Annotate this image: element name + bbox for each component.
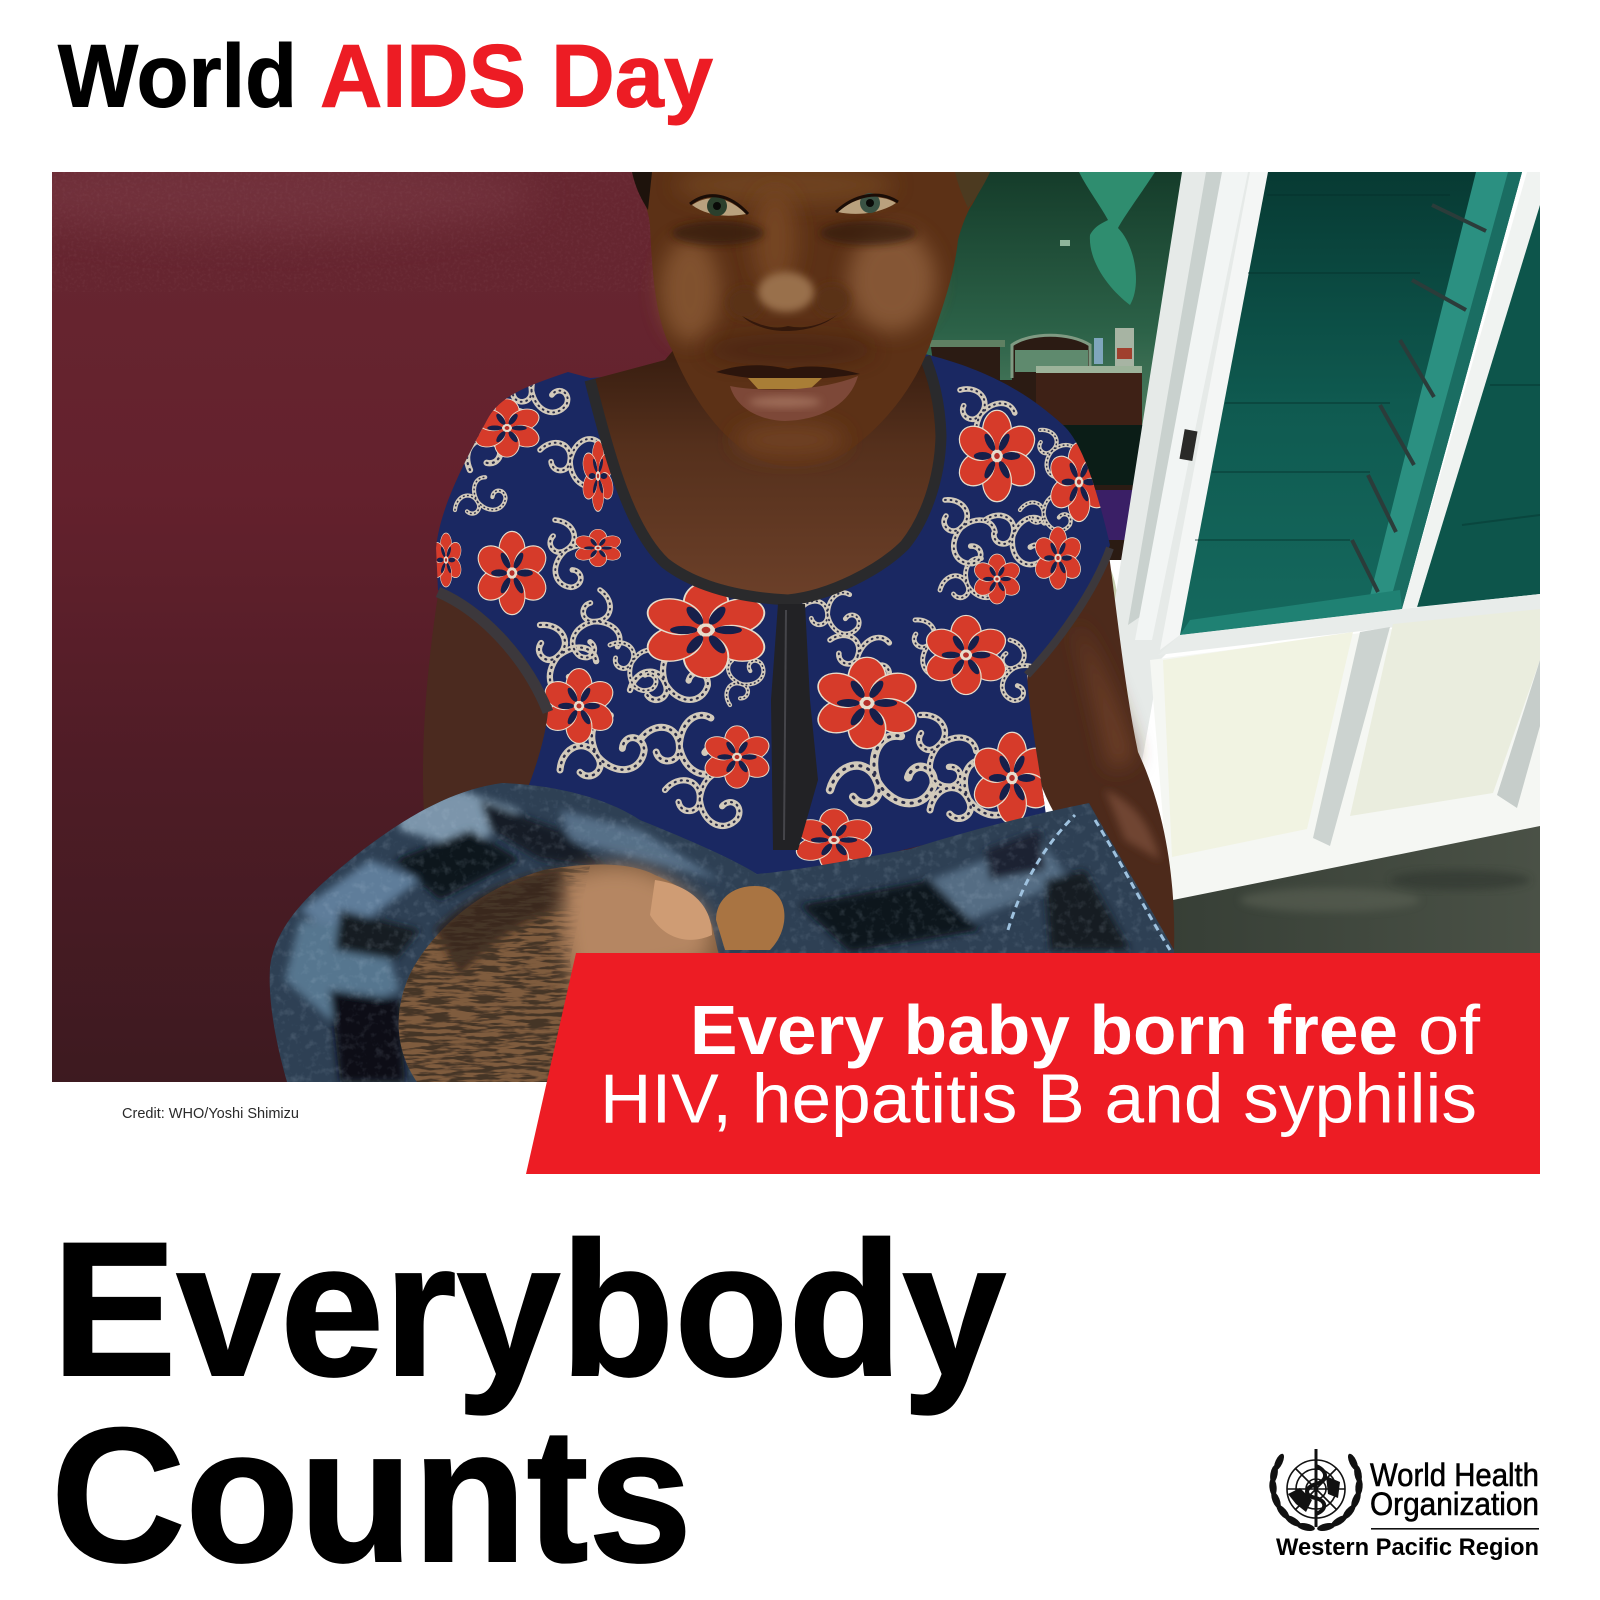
logo wordmark: Organization [1370,1486,1539,1522]
campaign slogan: Counts [51,1389,692,1600]
logo wordmark [1276,1457,1539,1561]
mouth and teeth [716,365,860,421]
concrete floor [1173,826,1540,953]
campaign slogan [51,1203,1006,1600]
red message banner [526,953,1540,1174]
cream wall panels with posts [1150,609,1540,905]
photo credit: Credit: WHO/Yoshi Shimizu [122,1105,299,1122]
teal louvre window panes [1180,172,1540,635]
blanket [265,780,1175,1082]
sleeve hems [438,592,548,712]
banner line 2: HIV, hepatitis B and syphilis [600,1060,1477,1138]
title: World AIDS Day: Day [551,26,713,126]
maroon wall background [0,155,952,1082]
window sill [1158,594,1540,655]
newborn baby head [399,865,784,1082]
title: World AIDS Day: AIDS [320,26,526,126]
icon: WHO emblem [1269,1449,1363,1532]
red flowers [429,399,1111,871]
WHO logo [1269,1449,1539,1561]
photo: mother holding newborn baby [0,155,1540,1082]
dress neckline and ribbon tie [590,357,941,850]
arms [423,555,1174,950]
face [632,165,990,467]
dotted swirls [446,357,1084,832]
banner line 1: Every baby born free [690,991,1398,1069]
floral dress [429,354,1111,885]
title: World AIDS Day: World [58,26,297,126]
title: World AIDS Day [58,26,713,126]
banner line 1: of [1418,991,1481,1069]
campaign slogan: Everybody [52,1203,1006,1416]
logo wordmark: Western Pacific Region [1276,1534,1539,1561]
white door frame [1115,172,1268,760]
eyes [690,193,898,216]
neck and chest [590,351,936,594]
logo wordmark: World Health [1370,1457,1539,1493]
green hospital room behind door [926,172,1182,600]
